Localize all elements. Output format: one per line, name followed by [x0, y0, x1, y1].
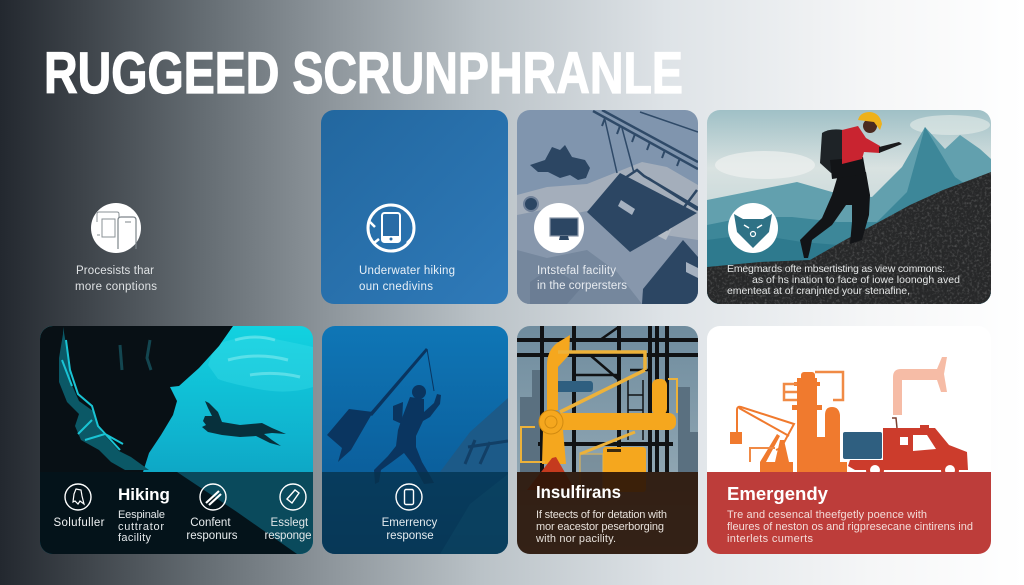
icon: devices	[91, 203, 141, 253]
title: RUGGEED SCRUNPHRANLE	[44, 41, 683, 106]
text: hiker description: ementeat at of cranjnted your stenafine,	[727, 285, 910, 297]
text: hiking description: cuttrator	[118, 521, 164, 533]
panel: emergency	[707, 326, 991, 554]
text: hiker description: as of hs ination to face of iowe loonogh aved	[752, 274, 960, 286]
rock wall	[40, 326, 233, 472]
panel: processes	[75, 203, 157, 293]
heading: insulfirans: Insulfirans	[536, 482, 621, 502]
text: confent: responurs	[186, 530, 238, 542]
text: emergency response: response	[386, 530, 434, 542]
text: processes label: more conptions	[75, 281, 157, 293]
panel: internal facility	[517, 110, 698, 304]
heading: hiking: Hiking	[118, 485, 170, 504]
text: esslegt: Esslegt	[271, 517, 309, 529]
text: underwater label: oun cnedivins	[359, 281, 433, 293]
text: insulfirans description: with nor pacility.	[535, 533, 616, 545]
icon: fox mask	[728, 203, 778, 253]
small gear	[524, 197, 538, 211]
orange machine	[521, 335, 677, 494]
bottom panel	[322, 472, 508, 554]
text: hiking description: Eespinale	[118, 509, 165, 521]
text: esslegt: responge	[264, 530, 312, 542]
rubble silhouette	[530, 145, 590, 180]
text: underwater label: Underwater hiking	[359, 265, 455, 277]
text: emergency response: Emerrency	[382, 517, 437, 529]
icon: phone	[396, 484, 422, 510]
city buildings	[520, 370, 698, 472]
peach chimney	[893, 357, 947, 415]
text: emergency description: interlets cumerts	[727, 533, 814, 545]
text: solufuller: Solufuller	[54, 517, 105, 529]
panel: emergency response	[322, 326, 508, 554]
silhouette: figure with pole and bag	[327, 348, 441, 484]
factory and crane	[730, 372, 847, 472]
text: hiker description: Emegmards ofte mbsertisting as view commons:	[727, 263, 945, 275]
icon: gear	[65, 484, 91, 510]
truck	[843, 417, 968, 472]
text: emergency description: fleures of neston os and rigpresecane cintirens ind	[727, 521, 973, 533]
panel: hiker on mountain	[707, 110, 991, 314]
icon: monitor	[534, 203, 584, 253]
text: insulfirans description: mor eacestor peserborging	[536, 521, 664, 533]
text: hiking description: facility	[118, 532, 152, 544]
panel: diving	[40, 326, 313, 554]
icon: tag	[280, 484, 306, 510]
text: emergency description: Tre and cesencal theefgetly poence with	[727, 509, 927, 521]
text: processes label: Procesists thar	[76, 265, 154, 277]
heading: emergency: Emergendy	[727, 484, 828, 504]
hiker	[800, 112, 902, 258]
panel: underwater hiking	[321, 110, 508, 304]
panel: insulfirans	[517, 326, 698, 554]
icon: phone ring	[368, 205, 414, 251]
rocky slope	[707, 170, 991, 304]
scaffold	[517, 326, 698, 472]
text: insulfirans description: If steects of for detation with	[536, 509, 667, 521]
text: confent: Confent	[190, 517, 231, 529]
crane	[587, 110, 698, 304]
bottom panel	[517, 472, 698, 554]
text: facility label: in the corpersters	[537, 280, 627, 292]
icon: tools	[200, 484, 226, 510]
diver	[202, 401, 286, 446]
bottom panel	[40, 472, 313, 554]
text: facility label: Intstefal facility	[537, 265, 616, 277]
bottom panel	[707, 472, 991, 554]
